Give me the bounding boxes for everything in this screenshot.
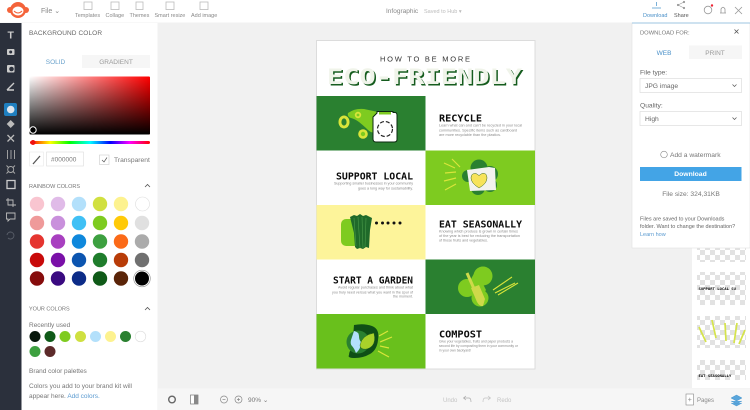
panel: background color xyxy=(22,23,158,410)
thumbnail: rays xyxy=(697,316,746,348)
document name: Infographic xyxy=(386,8,419,15)
active tool highlight xyxy=(4,103,17,116)
rainbow colors heading: RAINBOW COLORS xyxy=(29,184,80,190)
start a garden text: Avoid regular purchases and think about what xyxy=(338,286,413,290)
download button xyxy=(640,167,742,181)
zoom controls xyxy=(220,396,268,404)
start a garden text: you truly need versus what you want in the spur of xyxy=(332,290,413,294)
tool: draw xyxy=(7,83,14,90)
icon: layers xyxy=(731,395,742,406)
compost text: second life by composting them in your community or xyxy=(439,344,519,348)
brand kit note: appear here. Add colors. xyxy=(29,393,100,400)
icon: asparagus xyxy=(341,214,402,249)
icon: shopping bag with heart xyxy=(444,159,498,195)
hex input xyxy=(46,152,84,166)
quality field: High xyxy=(645,116,659,123)
icon: panel toggle xyxy=(190,395,198,404)
rainbow color swatches xyxy=(30,197,150,287)
redo xyxy=(483,396,512,404)
tab: web: WEB xyxy=(657,50,671,57)
thumbnail: eat seasonally: EAT SEASONALLY xyxy=(698,373,732,378)
download button: Download xyxy=(674,171,707,178)
your colors heading xyxy=(29,306,150,312)
panel: eat seasonally xyxy=(316,205,426,260)
brand kit note xyxy=(29,383,133,400)
recently used label: Recently used xyxy=(29,322,71,329)
tab: solid: SOLID xyxy=(46,59,66,66)
zoom controls: 90% ⌄ xyxy=(248,397,268,404)
file type field xyxy=(640,70,742,92)
quality field: Quality: xyxy=(640,102,663,110)
toolbar button: collage: Collage xyxy=(106,13,124,19)
download note: folder. Want to change the destination? xyxy=(640,224,735,230)
top toolbar xyxy=(0,0,750,22)
panel: recycle xyxy=(316,96,426,150)
recently used swatches xyxy=(30,331,146,357)
icon: monkey logo xyxy=(7,2,29,18)
icon: bell xyxy=(720,7,726,13)
toolbar button: download: Download xyxy=(643,13,667,19)
tool: sliders xyxy=(8,150,14,159)
toolbar button: smart resize: Smart resize xyxy=(154,13,185,19)
icon: close xyxy=(735,7,742,14)
download panel heading xyxy=(640,30,738,36)
eat seasonally text: of the year is best for reducing the transportation xyxy=(439,234,520,238)
bottom toolbar xyxy=(158,388,750,410)
saved status: Saved to Hub ▾ xyxy=(424,9,462,15)
quality field xyxy=(640,102,742,126)
toolbar button: download xyxy=(643,2,667,19)
poster title: ECO-FRIENDLY xyxy=(328,66,524,90)
icon: settings xyxy=(169,396,175,403)
eat seasonally text: Knowing which produce is grown in certain times xyxy=(439,230,518,234)
tool: camera xyxy=(7,49,14,55)
recycle text: Learn what can and can't be recycled in your local xyxy=(439,124,522,128)
pages button: Pages xyxy=(697,398,714,404)
toolbar button: share: Share xyxy=(674,13,689,19)
download note: Learn how xyxy=(640,232,666,238)
download panel heading: DOWNLOAD FOR: xyxy=(640,30,690,36)
download note: Files are saved to your Downloads xyxy=(640,216,725,222)
support local text xyxy=(334,172,413,190)
icon: shovel xyxy=(458,266,518,306)
brand color palettes label: Brand color palettes xyxy=(29,368,88,375)
panel: compost xyxy=(316,314,426,368)
eat seasonally text: of those fruits and vegetables. xyxy=(439,238,488,242)
page thumbnails strip xyxy=(692,248,750,388)
your colors heading: YOUR COLORS xyxy=(29,306,70,312)
rainbow colors heading xyxy=(29,184,150,190)
recycle text: communities. Specific items such as cardboard xyxy=(439,128,517,132)
compost text: Give your vegetables, fruits and paper products a xyxy=(439,340,513,344)
file type field: JPG image xyxy=(645,83,678,90)
pages button xyxy=(686,394,714,405)
support local text: goes a long way for sustainability. xyxy=(358,186,413,190)
tool: text: T xyxy=(7,30,14,42)
tool: crop xyxy=(6,198,16,207)
start a garden text: the moment. xyxy=(393,294,413,298)
hex input: #000000 xyxy=(51,156,77,164)
recycle text: RECYCLE xyxy=(439,114,482,124)
toolbar button: collage xyxy=(106,2,124,19)
toolbar button: share xyxy=(674,1,689,19)
tool: undo xyxy=(7,232,14,239)
tool: elements xyxy=(7,120,15,128)
toolbar button: add image: Add image xyxy=(191,13,217,19)
left tool rail xyxy=(0,23,22,410)
poster title: ECO-FRIENDLY xyxy=(327,65,522,89)
tab: gradient xyxy=(82,55,150,68)
toolbar button: add image xyxy=(191,2,217,19)
tool: shapes xyxy=(7,65,14,72)
poster subtitle: HOW TO BE MORE xyxy=(380,54,470,64)
poster xyxy=(316,40,535,369)
tab: print xyxy=(689,46,742,59)
start a garden text: START A GARDEN xyxy=(333,276,413,286)
thumbnail: support local: SUPPORT LOCAL SU xyxy=(698,286,737,291)
file menu: File ⌄ xyxy=(41,8,60,15)
file type field: File type: xyxy=(640,70,667,76)
compost text: in your own backyard! xyxy=(439,348,471,352)
eyedropper button xyxy=(30,152,44,166)
tab: solid xyxy=(29,55,82,69)
tab: print: PRINT xyxy=(705,50,725,57)
compost text xyxy=(439,330,519,352)
color picker xyxy=(30,76,150,134)
recycle text: are more recyclable than the plastics. xyxy=(439,133,501,137)
undo xyxy=(443,396,471,404)
icon: earth and leaf xyxy=(346,324,392,358)
panel: support local xyxy=(426,150,535,205)
redo: Redo xyxy=(497,398,512,404)
tool: cross tools xyxy=(8,135,14,142)
support local text: Supporting smaller businesses in your community xyxy=(334,182,413,186)
compost text: COMPOST xyxy=(439,330,482,340)
eat seasonally text xyxy=(439,220,522,242)
download note xyxy=(640,216,735,238)
toolbar button: themes: Themes xyxy=(130,13,150,19)
panel: start a garden xyxy=(426,260,535,314)
tool: focus xyxy=(6,166,15,174)
tab: web xyxy=(640,45,689,59)
tab: gradient: GRADIENT xyxy=(99,59,133,66)
add a watermark: Add a watermark xyxy=(670,152,721,159)
tool: comment xyxy=(6,213,15,221)
tool: border xyxy=(7,180,15,188)
panel heading: BACKGROUND COLOR xyxy=(29,30,102,37)
toolbar button: templates xyxy=(75,2,100,19)
transparent checkbox: Transparent xyxy=(114,157,150,164)
toolbar button: themes xyxy=(130,2,150,19)
start a garden text xyxy=(332,276,413,298)
recycle text xyxy=(439,114,522,137)
icon: recycling bottle xyxy=(338,109,397,142)
hue slider xyxy=(30,140,150,145)
support local text: SUPPORT LOCAL xyxy=(336,172,413,182)
eat seasonally text: EAT SEASONALLY xyxy=(439,220,522,230)
icon: help xyxy=(704,4,713,14)
transparent checkbox xyxy=(100,155,150,164)
toolbar button: smart resize xyxy=(154,2,185,19)
file size: File size: 324,31KB xyxy=(662,191,720,198)
panel: download for xyxy=(632,22,750,248)
thumbnail: blank xyxy=(697,248,746,262)
toolbar button: templates: Templates xyxy=(75,13,100,19)
undo: Undo xyxy=(443,398,458,404)
brand kit note: Colors you add to your brand kit will xyxy=(29,383,133,390)
